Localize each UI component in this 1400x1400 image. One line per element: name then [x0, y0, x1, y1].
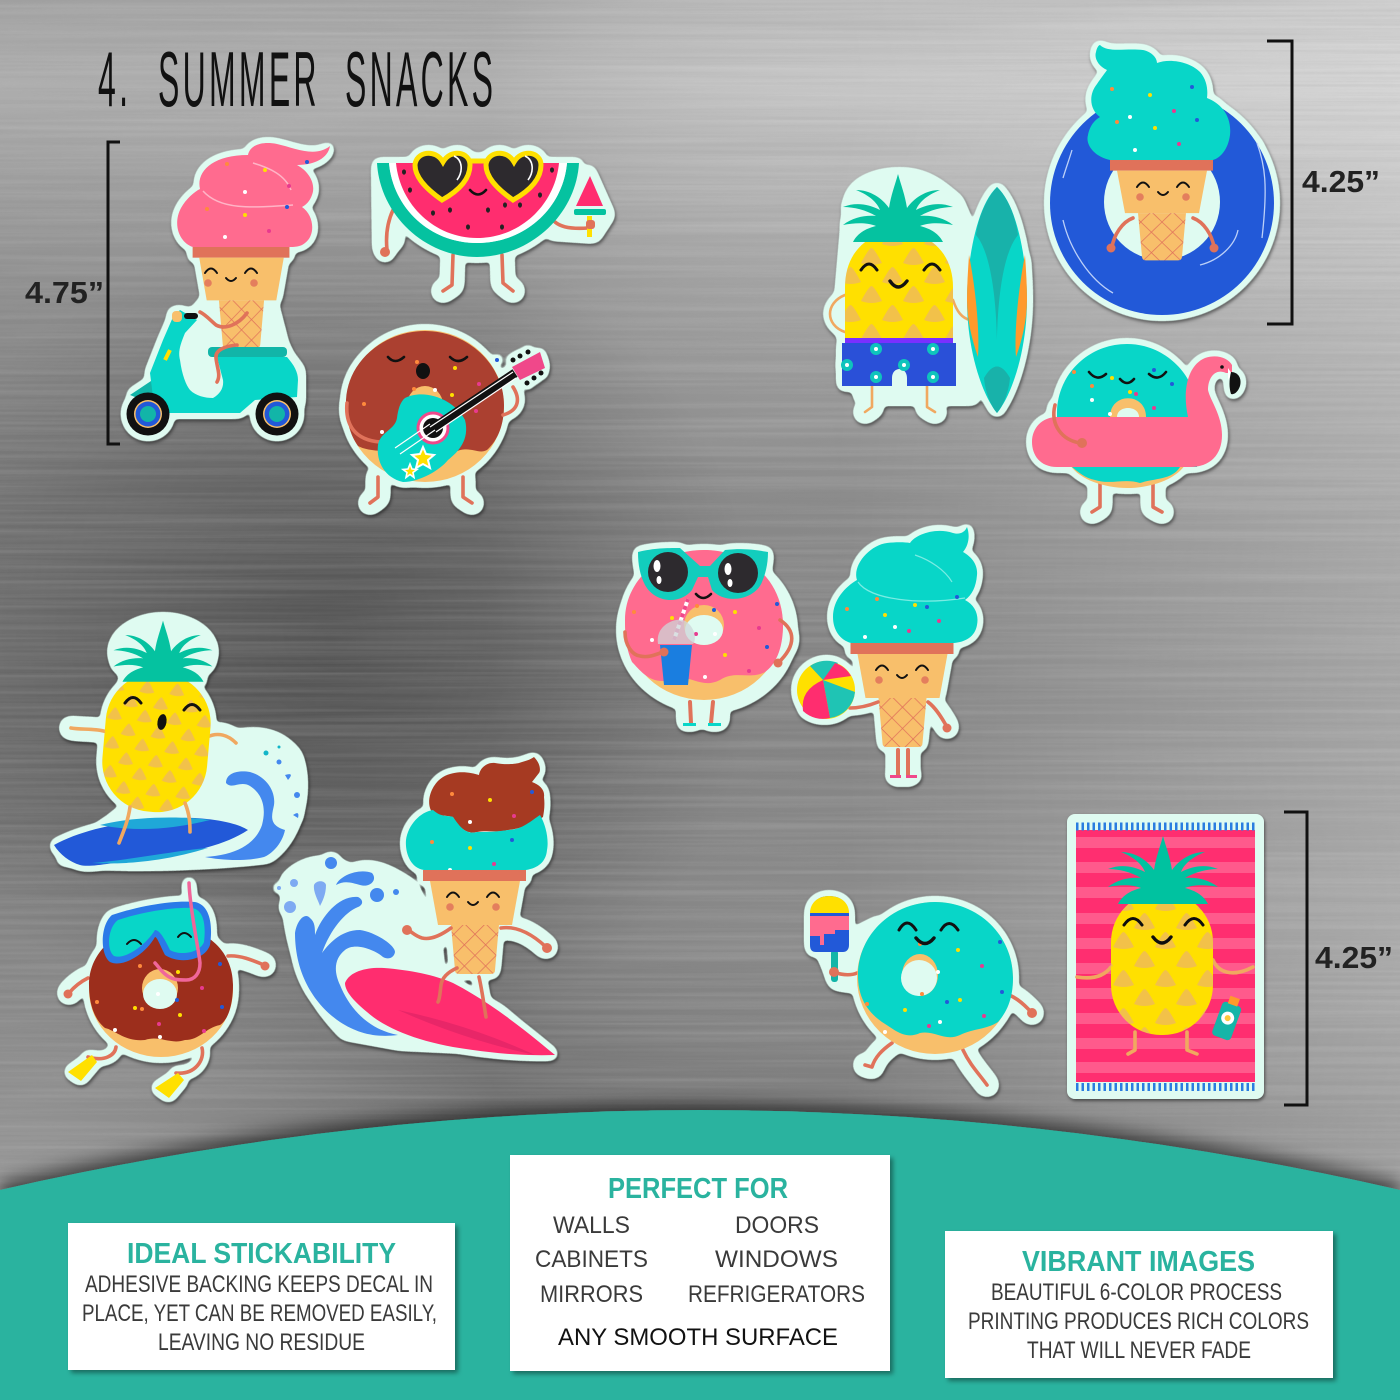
sticker: teal donut with popsicle — [810, 896, 1037, 1085]
icon: wave — [295, 857, 399, 1036]
text: surface list: WINDOWS — [715, 1246, 838, 1273]
icon: beach ball — [797, 661, 855, 719]
sticker: chocolate donut with snorkel — [64, 883, 270, 1098]
heading: vibrant images: VIBRANT IMAGES — [1022, 1246, 1255, 1278]
panel: ideal stickability — [68, 1223, 455, 1370]
sticker: pineapple in shorts with surfboard — [830, 173, 1027, 413]
icon: heart sunglasses — [415, 153, 541, 200]
sticker: pink donut with sunglasses and drink — [622, 548, 792, 726]
sticker: pineapple on beach towel — [1067, 814, 1264, 1099]
text: vibrant description: THAT WILL NEVER FADE — [1027, 1337, 1251, 1364]
text: surface list: MIRRORS — [540, 1281, 643, 1308]
title: 4. — [98, 35, 131, 123]
text: stickability description: ADHESIVE BACKING KEEPS DECAL IN — [85, 1271, 433, 1298]
icon: scooter wheels — [126, 392, 298, 436]
text: stickability description — [82, 1271, 437, 1356]
heading: ideal stickability: IDEAL STICKABILITY — [127, 1238, 396, 1270]
dimension: 4.75 inch — [25, 142, 120, 444]
text: vibrant description: PRINTING PRODUCES RICH COLORS — [968, 1308, 1309, 1335]
title: SNACKS — [345, 35, 496, 123]
sticker: teal ice cream with beach ball — [797, 527, 978, 778]
panel: vibrant images — [945, 1231, 1333, 1378]
icon: sunscreen bottle — [1211, 994, 1245, 1041]
sticker: chocolate donut with guitar — [346, 330, 545, 503]
title — [98, 35, 496, 123]
sticker: teal ice cream in blue swim ring — [1050, 45, 1274, 315]
icon: snorkel mask — [103, 883, 211, 980]
icon: guitar — [378, 350, 545, 482]
text: any smooth surface: ANY SMOOTH SURFACE — [558, 1324, 838, 1351]
text: surface list: DOORS — [735, 1212, 819, 1239]
dimension: 4.75 inch: 4.75” — [25, 275, 104, 310]
dimension: 4.25 inch top — [1267, 41, 1380, 324]
heading: perfect for: PERFECT FOR — [608, 1173, 788, 1205]
icon: surfboard — [967, 187, 1027, 413]
dimension: 4.25 inch bottom — [1284, 812, 1393, 1105]
text: vibrant description — [968, 1279, 1309, 1364]
text: stickability description: PLACE, YET CAN BE REMOVED EASILY, — [82, 1300, 437, 1327]
sticker: teal donut in flamingo float — [1032, 344, 1241, 512]
icon: popsicle — [810, 896, 849, 982]
dimension: 4.25 inch bottom: 4.25” — [1315, 940, 1393, 975]
icon: watermelon popsicle — [574, 176, 606, 237]
sticker: pineapple surfer — [54, 618, 302, 866]
sticker: ice cream surfer on wave — [277, 757, 555, 1055]
text: stickability description: LEAVING NO RESIDUE — [158, 1329, 365, 1356]
teal footer arc — [0, 1110, 1400, 1400]
sticker: watermelon with heart sunglasses — [377, 153, 610, 291]
title: SUMMER — [158, 35, 320, 123]
sticker: pink ice cream on scooter — [126, 143, 330, 436]
icon: blue drink — [658, 599, 695, 685]
icon: blue surfboard — [54, 818, 248, 866]
text: surface list: WALLS — [553, 1212, 630, 1239]
text: surface list — [535, 1212, 865, 1308]
panel: perfect for — [510, 1155, 890, 1371]
icon: pink surfboard — [345, 968, 555, 1055]
icon: wave — [205, 746, 300, 860]
dimension: 4.25 inch top: 4.25” — [1302, 164, 1380, 199]
icon: cat-eye sunglasses — [638, 548, 768, 600]
text: surface list: CABINETS — [535, 1246, 648, 1273]
text: vibrant description: BEAUTIFUL 6-COLOR PROCESS — [991, 1279, 1282, 1306]
text: surface list: REFRIGERATORS — [688, 1281, 865, 1308]
